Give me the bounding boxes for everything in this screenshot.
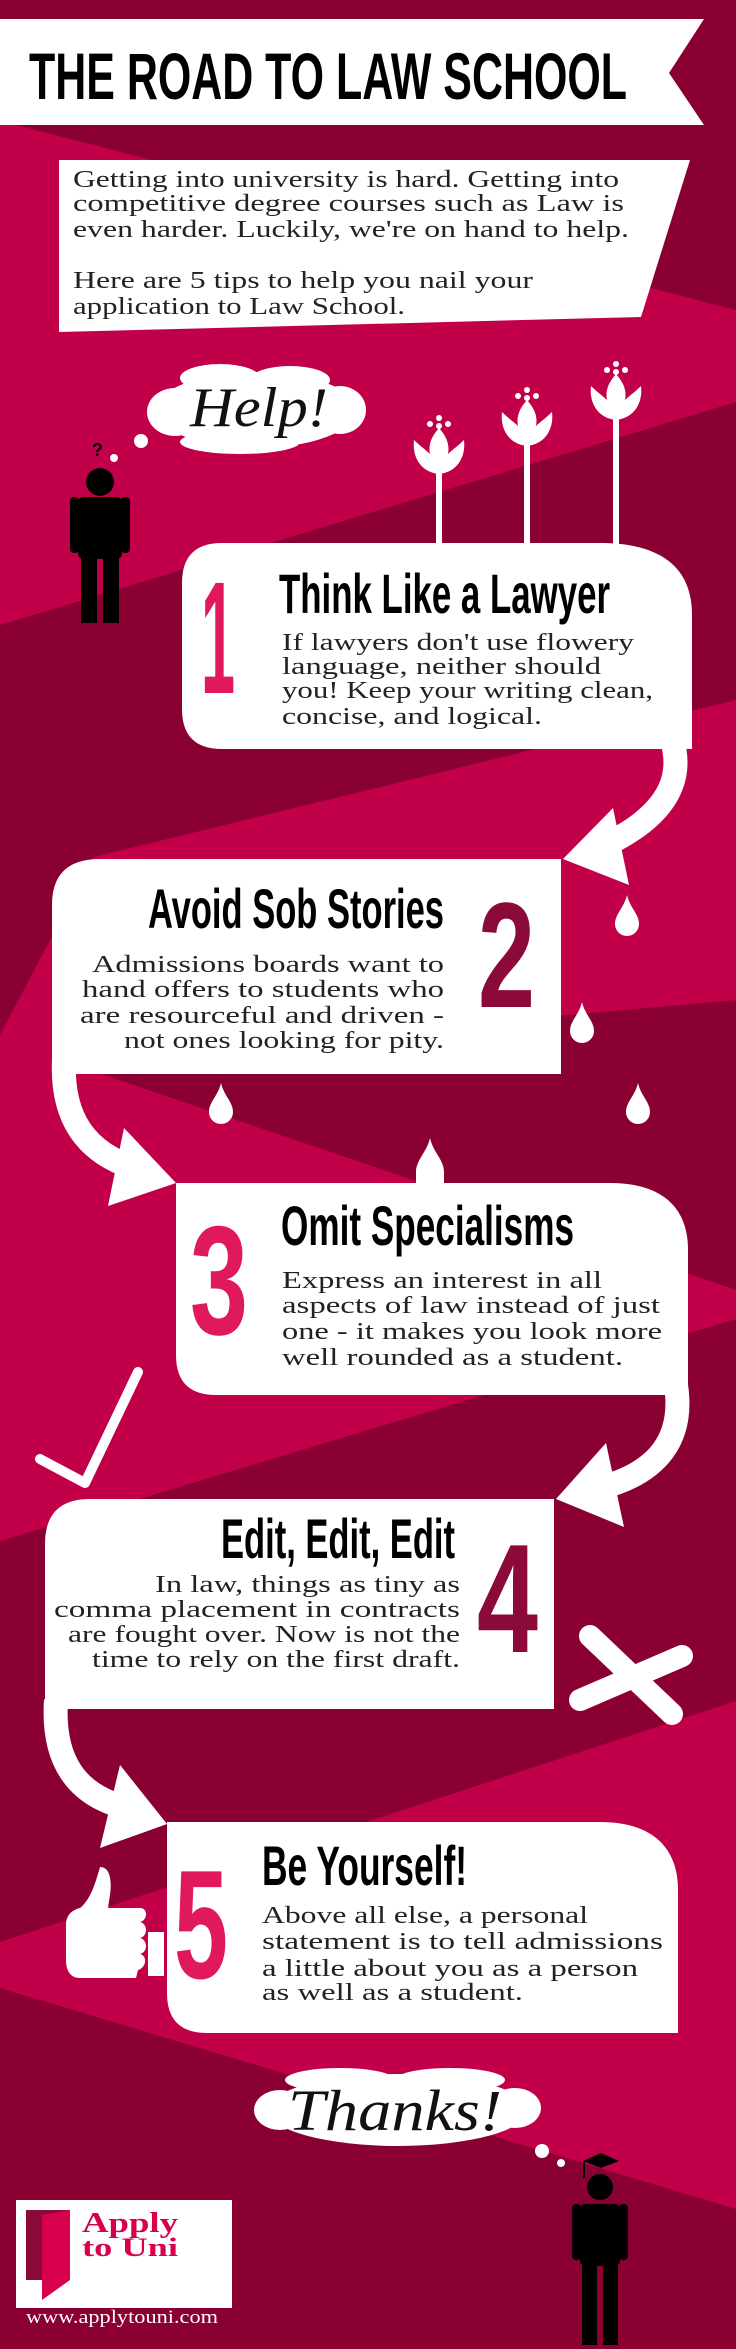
panel: tip 5: Be Yourself! — [262, 1834, 467, 1897]
panel: tip 3: 3 — [190, 1194, 248, 1367]
panel: tip 1 — [182, 543, 692, 749]
logo: Apply to Uni — [16, 2200, 232, 2308]
panel: tip 3: Omit Specialisms — [281, 1194, 574, 1257]
title banner — [0, 19, 704, 125]
thanks thought cloud: Thanks! — [288, 2078, 502, 2143]
icon: check mark — [40, 1372, 138, 1483]
logo: Apply to Uni: Apply — [82, 2208, 178, 2239]
thanks thought cloud — [254, 2068, 565, 2167]
panel: tip 5: 5 — [174, 1838, 228, 2011]
panel: tip 4: In law, things as tiny as — [155, 1572, 460, 1598]
website url: www.applytouni.com — [26, 2307, 218, 2328]
panel: tip 1: 1 — [201, 548, 235, 727]
icon: thumbs up — [66, 1867, 164, 1978]
intro text box: Here are 5 tips to help you nail your — [73, 268, 533, 294]
panel: tip 2: Admissions boards want to — [92, 952, 444, 978]
intro text box: application to Law School. — [73, 294, 405, 320]
panel: tip 4: comma placement in contracts — [54, 1597, 460, 1623]
panel: tip 3 — [176, 1183, 688, 1395]
panel: tip 2 — [52, 859, 561, 1074]
icon: flowers — [414, 361, 641, 550]
panel: tip 5: a little about you as a person — [262, 1956, 638, 1982]
arrow: 2 to 3 — [64, 1060, 176, 1206]
panel: tip 5: as well as a student. — [262, 1980, 523, 2006]
arrow: 4 to 5 — [56, 1700, 167, 1848]
panel: tip 2: hand offers to students who — [82, 977, 444, 1003]
panel: tip 4: are fought over. Now is not the — [68, 1622, 460, 1648]
arrow: 1 to 2 — [563, 740, 675, 885]
intro text box: even harder. Luckily, we're on hand to help. — [73, 217, 629, 243]
panel: tip 1: If lawyers don't use flowery — [282, 630, 634, 656]
arrow: 3 to 4 — [556, 1385, 677, 1527]
icon: confused person — [70, 440, 130, 623]
panel: tip 4: time to rely on the first draft. — [92, 1647, 460, 1673]
panel: tip 3: well rounded as a student. — [282, 1345, 623, 1371]
intro text box — [59, 160, 690, 332]
panel: tip 5: statement is to tell admissions — [262, 1929, 663, 1955]
panel: tip 1: concise, and logical. — [282, 704, 542, 730]
panel: tip 1: you! Keep your writing clean, — [282, 678, 653, 704]
panel: tip 2: not ones looking for pity. — [124, 1028, 444, 1054]
help thought cloud: Help! — [189, 377, 328, 439]
panel: tip 4 — [45, 1499, 554, 1709]
logo: Apply to Uni: to Uni — [82, 2233, 178, 2262]
panel: tip 5: Above all else, a personal — [262, 1903, 588, 1929]
intro text box: competitive degree courses such as Law is — [73, 191, 624, 217]
panel: tip 1: language, neither should — [282, 654, 601, 680]
panel: tip 2: are resourceful and driven - — [80, 1003, 444, 1029]
icon: cross mark — [580, 1636, 682, 1714]
panel: tip 4: 4 — [477, 1512, 538, 1685]
panel: tip 2: 2 — [478, 871, 535, 1039]
panel: tip 3: Express an interest in all — [282, 1268, 602, 1294]
panel: tip 4: Edit, Edit, Edit — [221, 1507, 455, 1570]
icon: confused person: ? — [92, 440, 103, 460]
panel: tip 5 — [167, 1822, 678, 2033]
intro text box: Getting into university is hard. Getting into — [73, 167, 619, 193]
panel: tip 3: aspects of law instead of just — [282, 1293, 660, 1319]
icon: graduate person — [572, 2153, 628, 2345]
panel: tip 2: Avoid Sob Stories — [148, 877, 444, 940]
help thought cloud — [110, 364, 366, 462]
panel: tip 3: one - it makes you look more — [282, 1319, 662, 1345]
icon: tear drops — [209, 895, 650, 1186]
